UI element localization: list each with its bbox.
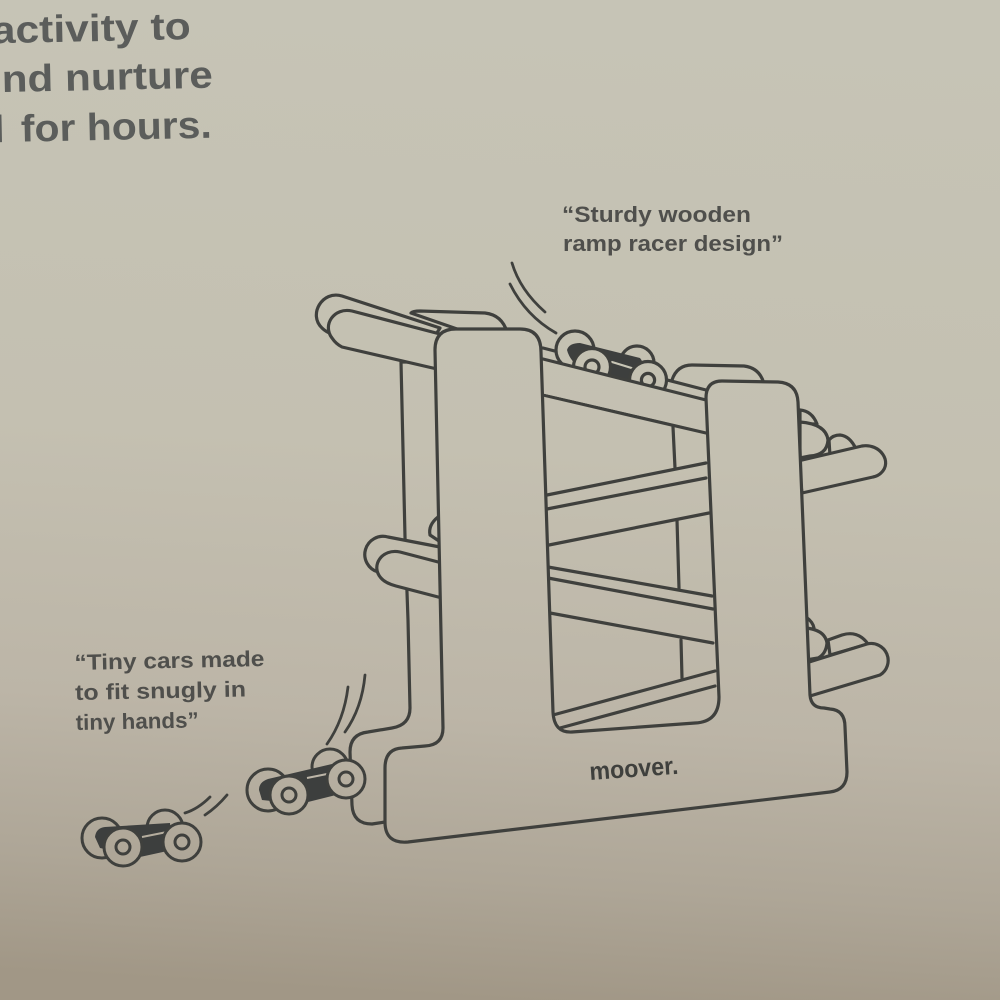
top car [556,331,666,398]
callout: tiny cars [74,646,266,735]
plank lines inside frame [543,348,715,728]
left car [82,810,201,866]
upper right humps and rail [800,410,817,424]
top left rails [316,295,440,360]
callout: tiny cars: “Tiny cars made [74,646,265,675]
lower left rails [430,517,445,545]
lower right humps and rail [806,617,814,632]
ramp racer toy illustration [316,295,888,842]
heading text fragment: nd nurture [1,55,213,101]
plank face below car [541,359,706,431]
callout: ramp racer design [562,202,783,256]
heading text fragment: for hours. [20,105,212,151]
callout: tiny cars: tiny hands” [75,707,199,735]
front panel [385,329,847,842]
middle car [247,749,365,814]
brand logo: moover. [588,752,679,786]
back upright and foot [350,362,460,824]
heading text fragment [0,6,214,151]
callout: tiny cars: to fit snugly in [75,676,246,705]
back humps on top [411,311,507,332]
motion lines [185,263,556,815]
callout: ramp racer design: “Sturdy wooden [562,202,751,227]
callout: ramp racer design: ramp racer design” [563,231,783,256]
